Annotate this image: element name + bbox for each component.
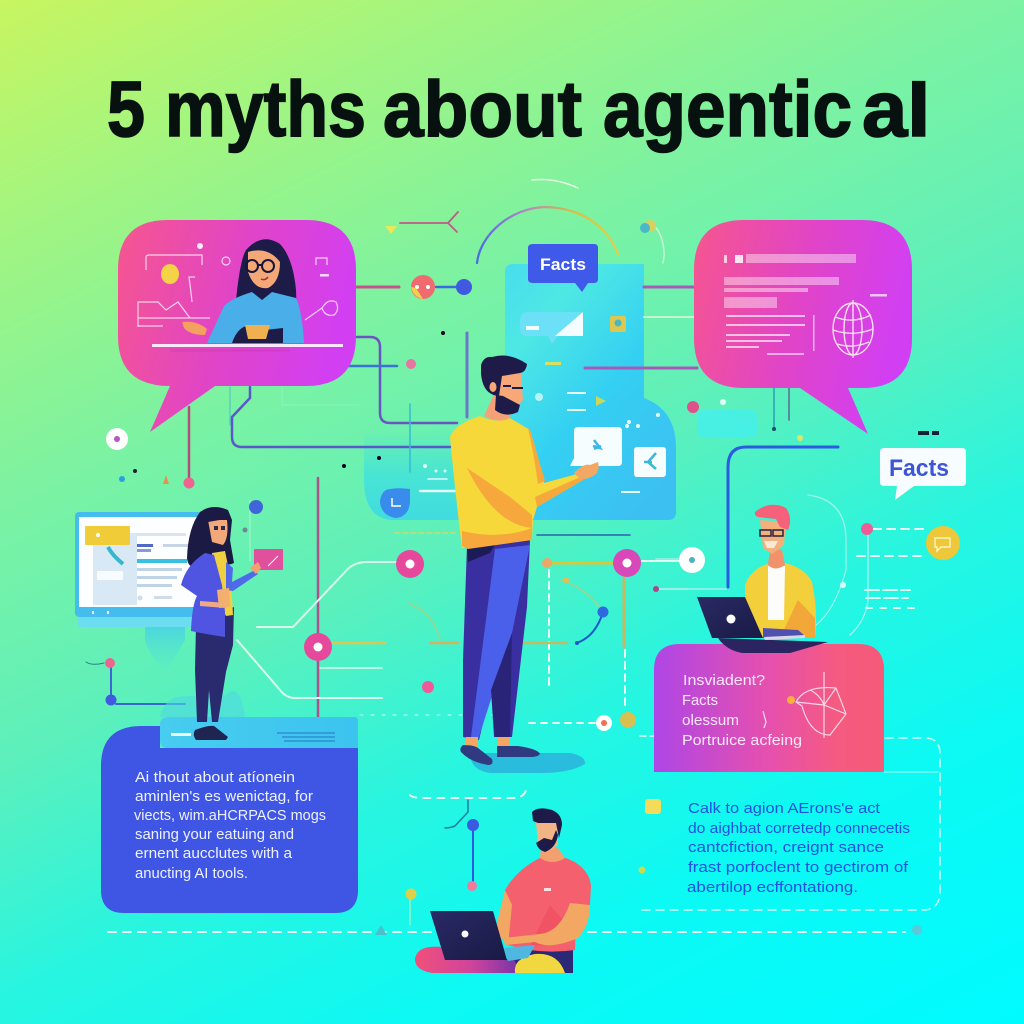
node: orange [411, 275, 435, 299]
jacket [181, 553, 225, 637]
hand [250, 562, 261, 574]
callout: Facts white tag [880, 448, 966, 500]
paragraph: olessum [682, 712, 739, 729]
beard [495, 395, 520, 415]
title: about [383, 64, 582, 153]
face [536, 822, 558, 852]
hair [187, 507, 234, 567]
glasses [503, 386, 523, 388]
laptop keys [504, 945, 535, 961]
panel: pink text panel [654, 644, 884, 772]
panel: right speech bubble [694, 220, 912, 434]
figure: central man with chat cards [450, 356, 666, 773]
icon: chat card in central panel [520, 312, 583, 344]
paragraph [682, 672, 802, 749]
panel: left speech bubble [118, 220, 356, 432]
shoes [460, 745, 492, 765]
figure: seated man with laptop [415, 808, 591, 973]
paragraph: blue text: do aighbat corretedp connecetis [688, 820, 910, 837]
figure: monitor [75, 512, 205, 672]
knee [515, 954, 565, 973]
table line [152, 344, 343, 347]
title: myths [165, 64, 366, 153]
paragraph: viects, wim.aHCRPACS mogs [134, 808, 326, 824]
hand [574, 462, 599, 479]
sweater [450, 416, 583, 548]
white shirt [768, 566, 785, 620]
hair [481, 356, 527, 396]
ankles [466, 737, 478, 749]
paragraph: ernent aucclutes with a [135, 846, 293, 862]
icon: blue clock badge [380, 488, 410, 518]
paragraph: blue text: cantcfiction, creignt sance [688, 839, 884, 856]
title: 5 [107, 64, 145, 153]
paragraph: blue text: abertilop ecffontationg. [687, 879, 858, 896]
callout: Facts dark tag [528, 244, 598, 292]
neck [540, 848, 565, 862]
title: agentic [603, 64, 852, 153]
leg [415, 947, 517, 973]
sweater [745, 563, 816, 638]
shadow [470, 753, 585, 773]
shoes [194, 726, 228, 740]
neck [484, 392, 512, 421]
icon: gold chat badge [926, 526, 960, 560]
title [107, 64, 930, 153]
text placeholder bars [724, 254, 887, 355]
shirt [212, 551, 233, 616]
connector nodes [105, 220, 939, 935]
hair [532, 808, 562, 838]
connector network [86, 179, 940, 932]
title: aI [862, 64, 930, 153]
laptop [697, 597, 763, 638]
paragraph: blue text: Calk to agion AErons'e act [688, 800, 881, 817]
neck [768, 548, 785, 568]
beard [536, 830, 558, 852]
central background panel [364, 264, 676, 520]
face [498, 372, 523, 412]
front arm [503, 903, 590, 945]
paragraph: Facts [682, 692, 718, 709]
paragraph: blue text [687, 800, 910, 896]
figure: man with laptop on pink panel [697, 505, 828, 653]
paragraph: Portruice acfeing [682, 732, 802, 749]
figure: standing woman with tablet [181, 507, 283, 740]
laptop [430, 911, 507, 960]
panel: bottom-left blue text panel [101, 691, 358, 913]
shirt [505, 857, 591, 952]
icon: network globe [796, 672, 846, 738]
shorts [510, 950, 573, 973]
callout: Facts white tag: Facts [889, 455, 949, 482]
icon: white chat cards [570, 427, 666, 477]
back arm [494, 890, 520, 942]
paragraph: anucting AI tools. [135, 866, 248, 882]
legs [463, 540, 530, 740]
paragraph: saning your eatuing and [135, 827, 294, 843]
hair [755, 505, 790, 530]
paragraph: Ai thout about atíonein [135, 770, 295, 786]
callout: Facts dark tag: Facts [540, 255, 586, 274]
icon: chart sketches [138, 255, 338, 327]
face [208, 520, 228, 545]
paragraph: aminlen's es wenictag, for [135, 789, 313, 805]
tablet [254, 549, 283, 570]
small cyan card [697, 410, 757, 438]
platform hill [160, 691, 245, 717]
platform [160, 717, 358, 748]
decorative dashes in central panel [535, 362, 726, 493]
paragraph [134, 770, 326, 882]
figure: woman with glasses [182, 239, 304, 343]
paragraph: Insviadent? [683, 672, 765, 689]
laptop base [718, 638, 828, 653]
legs [195, 607, 234, 722]
icon: globe [833, 300, 873, 358]
paragraph: blue text: frast porfoclent to gectirom of [688, 859, 909, 876]
face [760, 520, 786, 554]
